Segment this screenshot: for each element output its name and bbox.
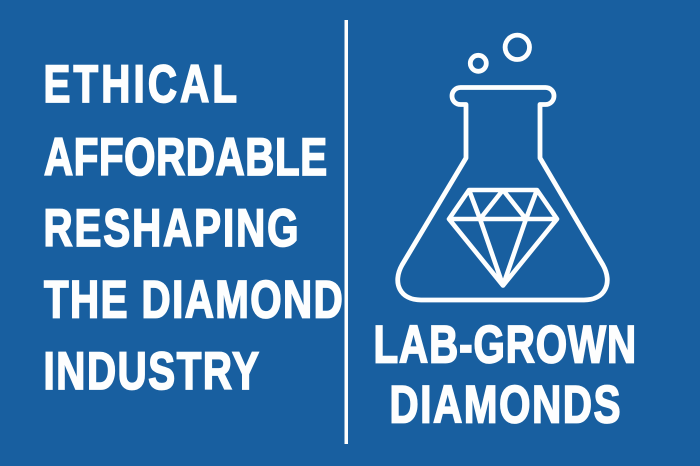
icon: large bubble — [505, 35, 530, 60]
headline line: reshaping: RESHAPING — [44, 198, 298, 257]
icon: flask with diamond and bubbles — [398, 35, 607, 300]
label line: diamonds: DIAMONDS — [390, 374, 621, 434]
icon: flask outline — [398, 88, 607, 300]
headline line: ethical: ETHICAL — [44, 54, 237, 113]
vertical divider — [344, 20, 348, 444]
headline line: industry: INDUSTRY — [44, 341, 259, 400]
headline line: the diamond: THE DIAMOND — [44, 269, 343, 329]
icon: diamond — [449, 190, 557, 286]
icon: small bubble — [470, 55, 486, 71]
headline line: affordable: AFFORDABLE — [44, 127, 327, 186]
left text block: headline — [44, 54, 343, 400]
right text block: label — [374, 314, 636, 434]
label line: lab-grown: LAB-GROWN — [374, 314, 636, 374]
